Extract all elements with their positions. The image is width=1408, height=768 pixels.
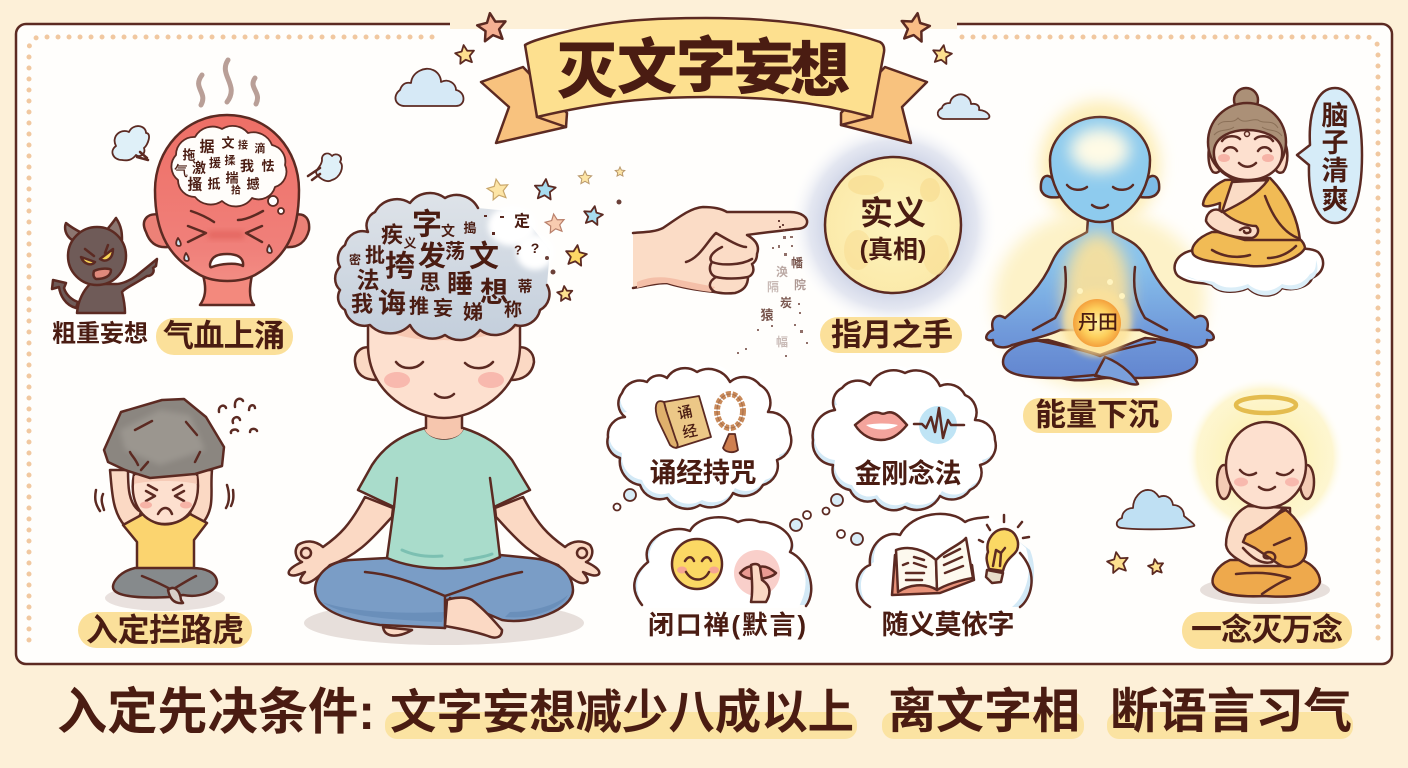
small stars lower right	[1106, 550, 1165, 575]
head words: 撼	[246, 176, 260, 192]
head words: 接	[238, 138, 248, 152]
thought cloud 3	[633, 513, 812, 640]
devil head	[68, 227, 126, 285]
label 随义莫依字: 随义莫依字	[882, 610, 1014, 640]
ears	[1041, 176, 1159, 197]
word cloud: 字	[412, 208, 442, 242]
rock	[104, 399, 224, 478]
central meditating child	[289, 193, 599, 645]
head words: 拾	[231, 184, 241, 196]
rock-carrying child	[95, 399, 257, 611]
speech bubble: 清	[1322, 156, 1348, 186]
foot	[168, 588, 183, 603]
belly glow	[1063, 233, 1131, 357]
shirt	[123, 513, 207, 570]
title text: 灭文字妄想	[557, 32, 850, 106]
head words: 怯	[261, 158, 275, 174]
head words: 气	[174, 163, 188, 179]
dantian label: 丹田	[1078, 312, 1118, 334]
head	[133, 474, 198, 524]
word cloud	[335, 193, 554, 340]
robe	[1243, 508, 1306, 567]
word cloud: 称	[504, 300, 522, 320]
tail	[52, 280, 78, 308]
head words: 揉	[224, 153, 236, 167]
blue energy figure	[986, 101, 1214, 390]
head shape	[155, 115, 299, 281]
legs	[1213, 560, 1320, 597]
label: 能量下沉: 能量下沉	[1035, 398, 1159, 432]
face	[1214, 130, 1282, 180]
head words	[174, 136, 275, 196]
highlights	[385, 712, 857, 739]
head words: 援	[209, 156, 221, 170]
legs	[315, 555, 573, 628]
word cloud: 睡	[447, 269, 473, 299]
pointing hand	[633, 207, 807, 293]
moon text: 实义	[860, 194, 926, 232]
label: 指月之手: 指月之手	[831, 318, 953, 352]
halo ring	[1236, 397, 1296, 413]
devil	[52, 218, 157, 313]
word cloud: ?	[514, 242, 522, 258]
head	[1050, 117, 1150, 222]
puff left	[112, 126, 149, 160]
falling word dust: 炭	[780, 296, 792, 310]
banner ribbon	[525, 18, 884, 117]
prayer beads icon	[717, 394, 743, 452]
legs	[113, 568, 217, 597]
angry face	[188, 211, 263, 242]
word cloud: 娣	[463, 301, 483, 324]
arms	[110, 470, 212, 530]
banner right tail	[841, 67, 927, 143]
falling word dust: 幡	[791, 255, 803, 270]
ears	[144, 214, 309, 247]
legs	[1003, 338, 1197, 378]
head words: 搔	[187, 176, 203, 194]
word cloud: 荡	[445, 240, 465, 263]
head words: 拖	[182, 148, 196, 162]
glow	[1185, 377, 1345, 537]
light bulb icon	[979, 515, 1029, 583]
key phrase 1: 文字妄想减少八成以上	[390, 686, 854, 738]
foot	[445, 598, 502, 638]
head words: 揣	[225, 170, 239, 186]
torso and arms	[986, 218, 1214, 347]
key phrase 2: 离文字相	[888, 686, 1080, 738]
falling word dust: 猿	[760, 308, 774, 322]
title banner	[481, 18, 927, 143]
label 诵经持咒: 诵经持咒	[650, 458, 756, 488]
thought in head	[171, 126, 286, 206]
word cloud: ?	[531, 240, 539, 256]
dissolving stars and particles	[486, 167, 625, 301]
shadow	[1200, 576, 1330, 604]
steam	[199, 60, 258, 105]
horns	[65, 218, 122, 240]
scroll icon: 诵	[676, 403, 694, 423]
speech bubble: 爽	[1322, 185, 1348, 215]
word cloud: 法	[356, 267, 380, 293]
head words: 我	[240, 158, 254, 174]
word cloud: 妄	[433, 296, 453, 320]
ears	[355, 347, 534, 380]
head words: 据	[199, 138, 215, 156]
thought bubbles	[614, 489, 863, 545]
lead text: 入定先决条件:	[57, 684, 375, 740]
word cloud: 批	[365, 244, 385, 267]
label: 粗重妄想: 粗重妄想	[52, 320, 148, 348]
word cloud: 定	[514, 212, 530, 230]
torso skin	[1226, 506, 1290, 566]
sweat	[176, 238, 272, 261]
head words: 抵	[207, 176, 221, 192]
bottom summary line	[57, 684, 1353, 740]
head	[368, 320, 520, 418]
speech bubble: 脑	[1322, 101, 1348, 131]
puff right	[308, 153, 342, 181]
word cloud: 我	[351, 292, 373, 316]
falling word dust: 涣	[776, 264, 788, 279]
hush icon	[734, 550, 780, 602]
head words: 文	[221, 136, 235, 150]
sound wave icon	[914, 406, 964, 444]
speech bubble	[1297, 88, 1362, 223]
moon with halo: (真相)	[860, 236, 926, 264]
label 闭口禅(默言): 闭口禅(默言)	[648, 610, 806, 640]
face	[396, 362, 493, 398]
word cloud: 想	[480, 276, 508, 308]
word cloud: 诲	[378, 288, 406, 318]
neck	[200, 275, 254, 305]
word cloud: 蒂	[517, 278, 533, 296]
word cloud: 义	[403, 236, 417, 250]
chest and arm skin	[1206, 180, 1268, 238]
small foot	[383, 627, 412, 636]
body and arm	[77, 259, 157, 313]
thought cloud 4	[856, 512, 1034, 640]
falling word dust: 隔	[767, 280, 779, 294]
moon with halo	[788, 120, 998, 330]
ushnisha	[1234, 88, 1258, 112]
ears	[1217, 465, 1231, 499]
shadow	[304, 601, 584, 645]
buddha on cloud	[1175, 88, 1323, 296]
book icon	[892, 538, 974, 595]
right arm	[495, 497, 599, 583]
falling word dust: 幅	[776, 334, 788, 349]
foot	[1062, 357, 1138, 385]
cloud top right	[938, 94, 989, 119]
hands	[1243, 548, 1275, 563]
cloud lower right	[1117, 490, 1194, 529]
thought cloud 1	[607, 363, 793, 509]
head words: 激	[192, 160, 206, 176]
cloud seat	[1175, 249, 1323, 296]
word cloud: 推	[409, 295, 429, 318]
head words: 滴	[254, 141, 266, 155]
word cloud: 文	[441, 223, 455, 239]
scroll icon: 经	[681, 422, 699, 442]
speech bubble: 子	[1322, 128, 1348, 158]
smile icon	[672, 539, 722, 589]
banner left tail	[481, 67, 567, 143]
legs	[1192, 232, 1305, 266]
neck	[425, 412, 463, 439]
motion marks	[95, 485, 233, 511]
label: 一念灭万念: 一念灭万念	[1191, 612, 1343, 648]
word cloud: 挎	[385, 250, 415, 284]
falling word dust: 院	[794, 277, 806, 292]
red angry head	[144, 60, 309, 305]
glow	[1040, 101, 1160, 229]
lips icon	[855, 412, 907, 440]
label: 入定拦路虎: 入定拦路虎	[86, 612, 244, 648]
word cloud: 搗	[463, 220, 477, 236]
label: 气血上涌: 气血上涌	[163, 318, 285, 354]
scroll icon	[656, 396, 711, 448]
left arm	[289, 497, 393, 583]
word cloud: 思	[420, 272, 440, 294]
cloud top left	[395, 69, 464, 106]
ears	[1208, 140, 1287, 173]
shirt	[358, 428, 530, 568]
word cloud: 密	[349, 252, 361, 267]
mouth	[210, 254, 243, 267]
head	[1226, 422, 1306, 508]
word cloud: 文	[469, 240, 499, 274]
decorative stars top	[454, 11, 953, 65]
label 金刚念法: 金刚念法	[854, 458, 962, 489]
devil face	[81, 249, 113, 264]
torso robe	[1203, 178, 1300, 240]
thought cloud 2	[813, 365, 998, 510]
thought dots	[268, 196, 278, 206]
falling word dust	[737, 236, 808, 357]
word cloud: 发	[418, 240, 446, 272]
word cloud: 疾	[381, 222, 403, 248]
shadow	[105, 585, 225, 611]
bald monk with halo	[1185, 377, 1345, 604]
hair	[1208, 103, 1286, 181]
dantian orb	[1063, 289, 1131, 357]
key phrase 3: 断语言习气	[1110, 686, 1352, 738]
